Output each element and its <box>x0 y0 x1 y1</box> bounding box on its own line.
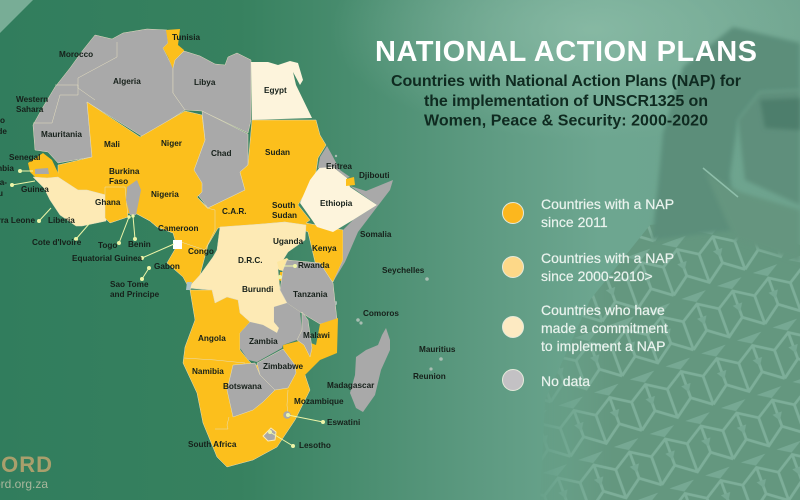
country labels: Ghana <box>95 198 121 207</box>
country labels: and Principe <box>110 290 160 299</box>
country labels: Djibouti <box>359 171 389 180</box>
face <box>738 90 800 205</box>
country labels: Kenya <box>312 244 337 253</box>
Chad <box>194 111 248 208</box>
country labels: Sudan <box>272 211 297 220</box>
country labels: Cameroon <box>158 224 198 233</box>
Ghana <box>105 187 128 223</box>
country labels: Sao Tome <box>110 280 149 289</box>
country labels: Sudan <box>265 148 290 157</box>
country labels: Gabon <box>154 262 180 271</box>
legend: NAP since 2000-2010 <box>502 250 674 284</box>
legend: commitment: Countries who have <box>541 302 665 318</box>
legend: NAP since 2011 <box>502 196 674 230</box>
legend: NAP since 2000-2010: since 2000-2010> <box>541 268 653 284</box>
country labels: Zimbabwe <box>263 362 303 371</box>
Mali, Niger, Burkina Faso, Nigeria, Cameroon <box>58 102 215 250</box>
country labels: Comoros <box>363 309 399 318</box>
country labels: Burundi <box>242 285 273 294</box>
Cabinda sliver <box>186 282 192 290</box>
country labels: Rwanda <box>298 261 330 270</box>
subtitle: Women, Peace & Security: 2000-2020 <box>424 112 708 130</box>
country labels <box>0 33 456 450</box>
Rwanda patch <box>277 258 293 272</box>
legend: commitment <box>502 302 668 354</box>
country labels: Mali <box>104 140 120 149</box>
country labels: Sahara <box>16 105 44 114</box>
country labels: Uganda <box>273 237 303 246</box>
country labels: Reunion <box>413 372 446 381</box>
country labels: Equatorial Guinea <box>72 254 143 263</box>
Tanzania <box>280 260 337 324</box>
country labels: Chad <box>211 149 231 158</box>
country labels: Mauritius <box>419 345 456 354</box>
Sudan, South Sudan and central yellow block <box>137 120 343 290</box>
photo: woman with headscarf <box>540 27 800 500</box>
country labels: Western <box>16 95 48 104</box>
country labels: C.A.R. <box>222 207 247 216</box>
country labels: Mauritania <box>41 130 82 139</box>
country labels: Angola <box>198 334 226 343</box>
islands <box>335 155 443 371</box>
Lesotho <box>263 428 276 441</box>
country labels: Benin <box>128 240 151 249</box>
country labels: Niger <box>161 139 183 148</box>
country labels: Congo <box>188 247 214 256</box>
country labels: Faso <box>109 177 128 186</box>
Eswatini <box>283 411 291 419</box>
Madagascar <box>350 328 390 412</box>
country labels: Namibia <box>192 367 224 376</box>
country labels: Egypt <box>264 86 287 95</box>
country labels: Algeria <box>113 77 141 86</box>
title: NATIONAL ACTION PLANS <box>375 36 757 68</box>
knitted garment <box>562 225 800 500</box>
country labels: Zambia <box>249 337 278 346</box>
subtitle <box>391 73 741 130</box>
Libya <box>173 51 251 133</box>
legend <box>502 196 674 390</box>
Zambia <box>240 303 302 362</box>
Zimbabwe <box>257 349 296 390</box>
D.R.C., Uganda and Burundi <box>188 222 306 333</box>
West Africa cream block <box>33 177 106 226</box>
headscarf <box>652 27 800 240</box>
Senegal <box>28 153 60 182</box>
country labels: South <box>272 201 295 210</box>
country labels: Senegal <box>9 153 40 162</box>
Gambia <box>35 168 49 174</box>
country labels: Seychelles <box>382 266 425 275</box>
legend: NAP since 2011: Countries with a NAP <box>541 196 674 212</box>
mask <box>705 172 800 262</box>
subtitle: the implementation of UNSCR1325 on <box>424 93 708 110</box>
Botswana <box>227 363 275 417</box>
North-west no-data countries <box>33 29 185 163</box>
country labels: Somalia <box>360 230 392 239</box>
legend: NAP since 2000-2010: Countries with a NAP <box>541 250 674 266</box>
legend: commitment: to implement a NAP <box>541 338 666 354</box>
country labels: Eritrea <box>326 162 352 171</box>
legend: no data: No data <box>541 373 590 389</box>
country labels: Lesotho <box>299 441 331 450</box>
Tunisia <box>163 29 184 69</box>
country labels: Botswana <box>223 382 262 391</box>
leader lines <box>10 170 324 448</box>
country labels: Tanzania <box>293 290 328 299</box>
country labels: Morocco <box>59 50 93 59</box>
country labels: Madagascar <box>327 381 375 390</box>
country labels: Malawi <box>303 331 330 340</box>
subtitle: Countries with National Action Plans (NAP) for <box>391 73 741 90</box>
country labels: Libya <box>194 78 216 87</box>
Ethiopia <box>300 167 377 232</box>
country labels: Liberia <box>48 216 75 225</box>
country labels: South Africa <box>188 440 237 449</box>
Somalia <box>333 180 393 282</box>
country labels: D.R.C. <box>238 256 263 265</box>
Djibouti <box>346 177 355 186</box>
country labels: Ethiopia <box>320 199 353 208</box>
country labels: Guinea <box>21 185 49 194</box>
Togo and Benin <box>126 180 141 215</box>
country labels: Togo <box>98 241 117 250</box>
country labels: Eswatini <box>327 418 360 427</box>
glasses <box>760 98 800 130</box>
legend: no data <box>502 370 590 390</box>
Southern yellow block: Angola, Namibia, South Africa, Mozambique, Malawi <box>183 290 310 467</box>
map of Africa <box>28 29 443 467</box>
country labels: Cote d'Ivoire <box>32 238 82 247</box>
Burundi patch <box>279 272 287 283</box>
Malawi strip <box>297 312 312 357</box>
legend: commitment: made a commitment <box>541 320 668 336</box>
country labels: Tunisia <box>172 33 200 42</box>
logo <box>0 452 53 491</box>
Egypt <box>251 61 312 120</box>
Equatorial Guinea <box>173 240 182 249</box>
country labels: Mozambique <box>294 397 344 406</box>
legend: NAP since 2011: since 2011 <box>541 214 608 230</box>
Eritrea <box>318 146 350 178</box>
country labels: Burkina <box>109 167 140 176</box>
country labels: Nigeria <box>151 190 179 199</box>
